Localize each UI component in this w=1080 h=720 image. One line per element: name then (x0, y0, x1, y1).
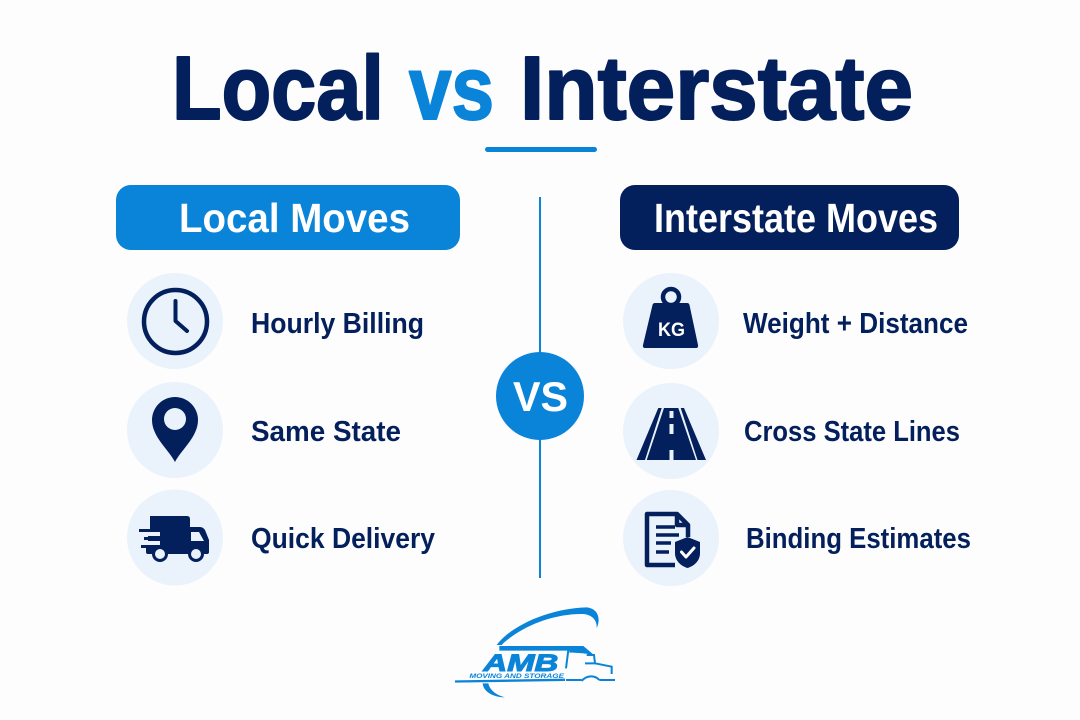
item: weight + distance (623, 273, 968, 369)
icon: map pin (152, 397, 198, 462)
heading: interstate moves (620, 185, 959, 250)
item: weight + distance: Weight + Distance (743, 308, 968, 340)
heading: interstate moves: Interstate Moves (654, 195, 938, 241)
logo: AMB moving and storage (455, 607, 615, 697)
item: quick delivery: Quick Delivery (251, 523, 435, 555)
item: same state (127, 382, 401, 478)
item: binding estimates: Binding Estimates (746, 523, 971, 555)
icon: kg weight (643, 289, 698, 348)
icon: delivery truck (139, 516, 209, 560)
title: Local (172, 39, 384, 139)
item: binding estimates (623, 490, 971, 586)
icon: kg weight: KG (658, 320, 685, 341)
title: Interstate (520, 39, 913, 139)
item: hourly billing: Hourly Billing (251, 308, 424, 340)
icon: document with shield (647, 514, 700, 568)
item: hourly billing (127, 273, 424, 369)
item: cross state lines: Cross State Lines (744, 416, 960, 448)
icon: clock (144, 290, 207, 353)
item: cross state lines (623, 383, 960, 479)
title (172, 39, 913, 139)
icon: highway road (636, 408, 706, 460)
logo: AMB moving and storage: MOVING AND STORAGE (469, 674, 565, 680)
item: same state: Same State (251, 416, 401, 448)
title: vs (409, 39, 494, 139)
heading: local moves: Local Moves (179, 195, 410, 241)
item: quick delivery (127, 490, 435, 586)
vs badge: VS (513, 373, 568, 420)
heading: local moves (116, 185, 460, 250)
vs badge (496, 352, 584, 440)
logo: AMB moving and storage: AMB (482, 650, 558, 677)
